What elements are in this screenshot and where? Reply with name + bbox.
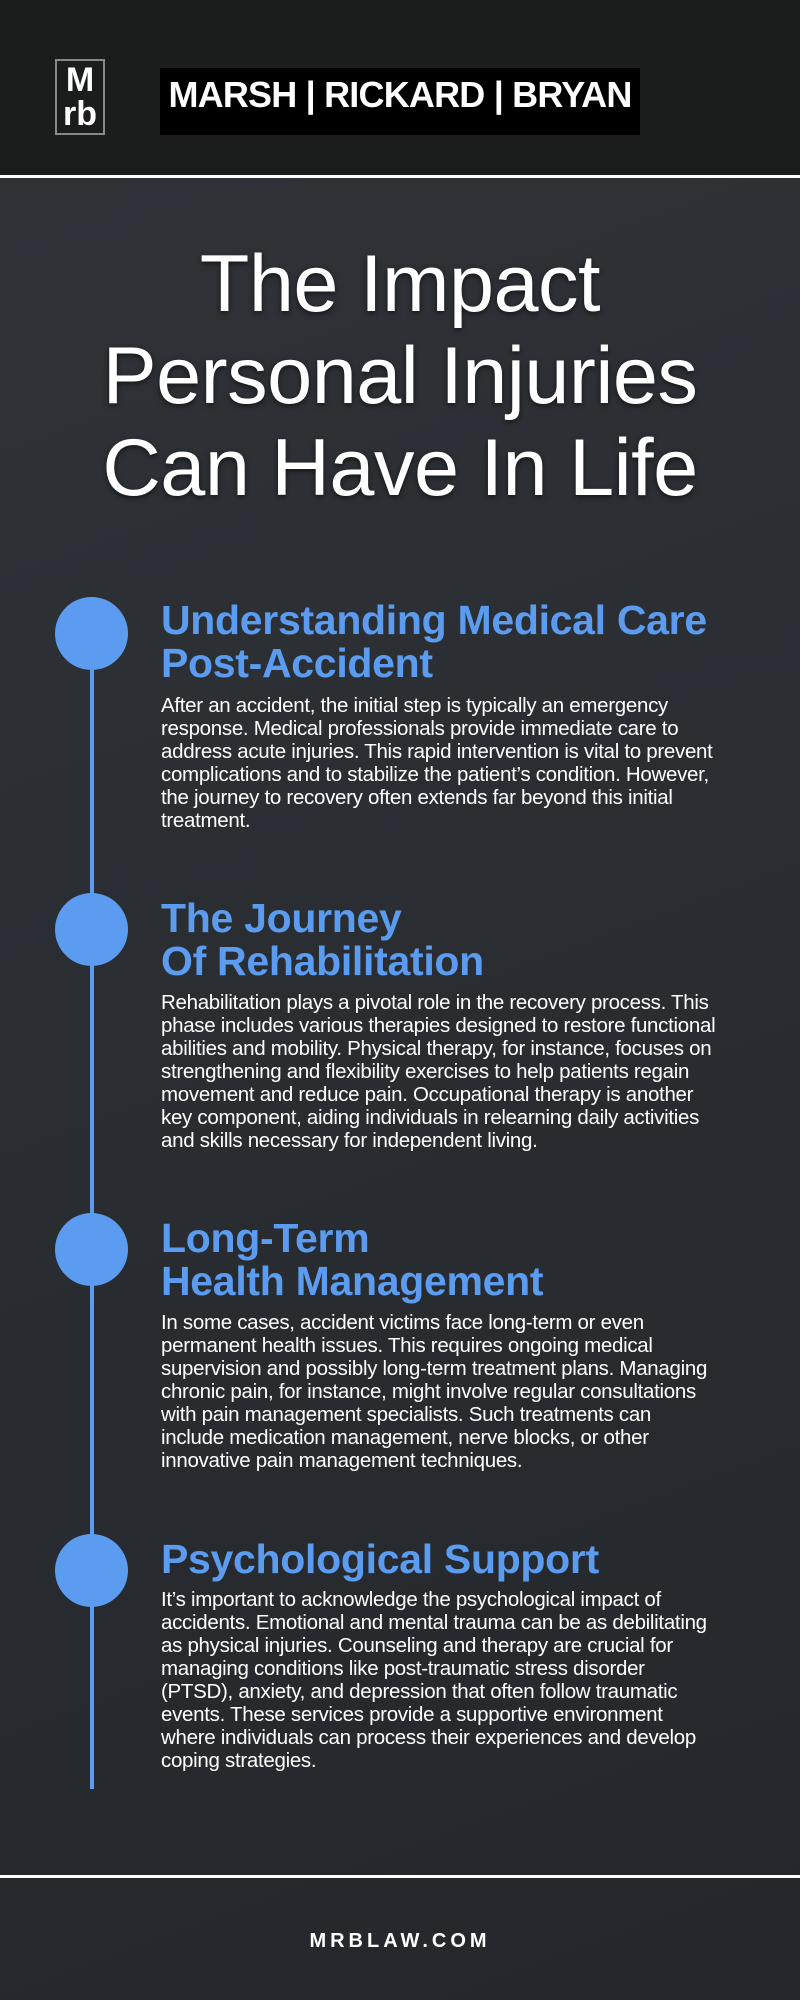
body text — [161, 991, 715, 1152]
body text: coping strategies. — [161, 1749, 316, 1772]
header bar — [0, 0, 800, 175]
body text: It’s important to acknowledge the psychological impact of — [161, 1588, 661, 1611]
body text: response. Medical professionals provide immediate care to — [161, 717, 678, 740]
title — [102, 239, 698, 513]
icon: circle marker — [55, 893, 128, 966]
logo: Mrb — [55, 59, 105, 135]
section 2 — [55, 893, 715, 1152]
title: Personal Injuries — [103, 331, 697, 421]
body text: innovative pain management techniques. — [161, 1449, 522, 1472]
body text: supervision and possibly long-term treatment plans. Managing — [161, 1357, 707, 1380]
section 1 — [55, 597, 713, 832]
body text: treatment. — [161, 809, 250, 832]
heading — [161, 1215, 544, 1304]
body text — [161, 1311, 707, 1472]
heading: Health Management — [161, 1258, 543, 1304]
heading — [161, 597, 707, 686]
body text: where individuals can process their experiences and develop — [161, 1726, 696, 1749]
heading: Of Rehabilitation — [161, 938, 484, 984]
icon: circle marker — [55, 1534, 128, 1607]
body text: with pain management specialists. Such treatments can — [161, 1403, 651, 1426]
body text: In some cases, accident victims face long-term or even — [161, 1311, 644, 1334]
firm name — [160, 68, 640, 135]
body text: abilities and mobility. Physical therapy, for instance, focuses on — [161, 1037, 711, 1060]
body text: strengthening and flexibility exercises to help patients regain — [161, 1060, 689, 1083]
heading: The Journey — [161, 895, 401, 941]
heading: Understanding Medical Care — [161, 597, 707, 643]
icon: circle marker — [55, 597, 128, 670]
heading: Long-Term — [161, 1215, 369, 1261]
icon: circle marker — [55, 1213, 128, 1286]
body text: permanent health issues. This requires ongoing medical — [161, 1334, 653, 1357]
timeline line — [90, 630, 94, 1789]
logo: Mrb: M — [66, 61, 94, 99]
body text: movement and reduce pain. Occupational therapy is another — [161, 1083, 693, 1106]
body text: include medication management, nerve blocks, or other — [161, 1426, 649, 1449]
body text: complications and to stabilize the patient’s condition. However, — [161, 763, 709, 786]
firm name: MARSH | RICKARD | BRYAN — [168, 74, 632, 115]
body text: events. These services provide a supportive environment — [161, 1703, 663, 1726]
section 3 — [55, 1213, 707, 1472]
body text: accidents. Emotional and mental trauma can be as debilitating — [161, 1611, 707, 1634]
heading: Psychological Support — [161, 1536, 599, 1582]
body text — [161, 694, 713, 832]
section 4 — [55, 1534, 707, 1772]
title: Can Have In Life — [102, 423, 698, 513]
body text: as physical injuries. Counseling and therapy are crucial for — [161, 1634, 673, 1657]
body text: the journey to recovery often extends far beyond this initial — [161, 786, 673, 809]
body text: key component, aiding individuals in relearning daily activities — [161, 1106, 699, 1129]
body text: phase includes various therapies designed to restore functional — [161, 1014, 715, 1037]
body text — [161, 1588, 707, 1772]
title: The Impact — [200, 239, 600, 329]
body text: address acute injuries. This rapid intervention is vital to prevent — [161, 740, 713, 763]
body text: chronic pain, for instance, might involve regular consultations — [161, 1380, 696, 1403]
body text: managing conditions like post-traumatic stress disorder — [161, 1657, 645, 1680]
body text: Rehabilitation plays a pivotal role in the recovery process. This — [161, 991, 709, 1014]
body text: and skills necessary for independent living. — [161, 1129, 538, 1152]
body text: After an accident, the initial step is typically an emergency — [161, 694, 668, 717]
logo: Mrb: rb — [63, 95, 97, 133]
heading: Post-Accident — [161, 640, 433, 686]
footer: website: MRBLAW.COM — [309, 1930, 491, 1952]
body text: (PTSD), anxiety, and depression that often follow traumatic — [161, 1680, 677, 1703]
heading — [161, 895, 484, 984]
